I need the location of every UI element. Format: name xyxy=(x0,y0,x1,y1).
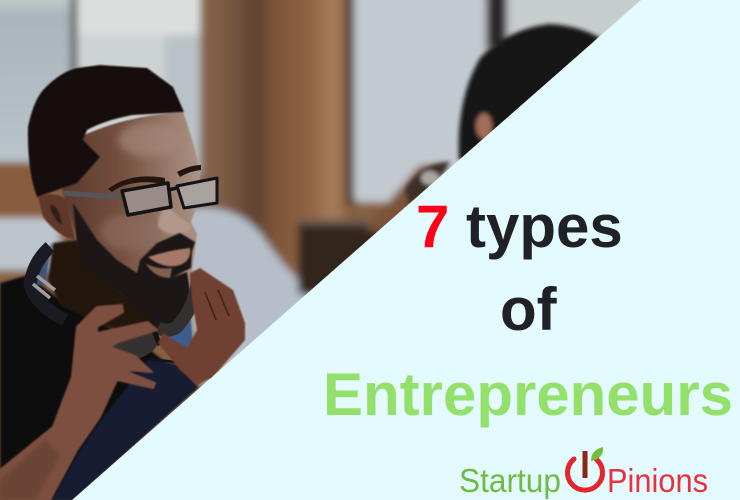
man: forehead highlight xyxy=(118,123,182,157)
man: torso xyxy=(0,275,197,500)
man: collar strip xyxy=(36,242,52,286)
man: eyebrows xyxy=(108,176,165,192)
background person xyxy=(405,24,600,205)
title xyxy=(323,193,733,428)
man: nose xyxy=(158,205,191,234)
title line: Entrepreneurs: Entrepreneurs xyxy=(323,361,733,428)
logo: StartupOpinions xyxy=(459,447,708,499)
man: chin skin xyxy=(146,264,172,278)
man: ear shadow xyxy=(50,205,62,225)
man: wrist shadow xyxy=(0,440,60,500)
man: right hand fingers xyxy=(205,290,229,320)
icon: glasses xyxy=(63,178,217,215)
logo text: Startup: Startup xyxy=(459,462,561,499)
man: sweater front xyxy=(52,358,198,500)
man: left hand xyxy=(0,305,157,500)
man: right hand xyxy=(158,268,245,385)
icon: power symbol xyxy=(568,451,603,490)
man: cheek shade xyxy=(99,214,143,250)
man: blue shirt at neck xyxy=(168,319,193,348)
man: lips xyxy=(148,248,190,266)
man: ear xyxy=(38,194,75,240)
man: beard xyxy=(73,203,195,331)
logo text: Pinions: Pinions xyxy=(607,462,708,499)
icon: headphones xyxy=(30,247,212,378)
man: neck xyxy=(46,238,160,331)
icon: leaf xyxy=(591,447,603,461)
man: face xyxy=(62,112,200,300)
man: hair xyxy=(28,65,184,197)
title line: 7 types: 7 types xyxy=(416,193,623,260)
title line: of: of xyxy=(500,276,558,343)
